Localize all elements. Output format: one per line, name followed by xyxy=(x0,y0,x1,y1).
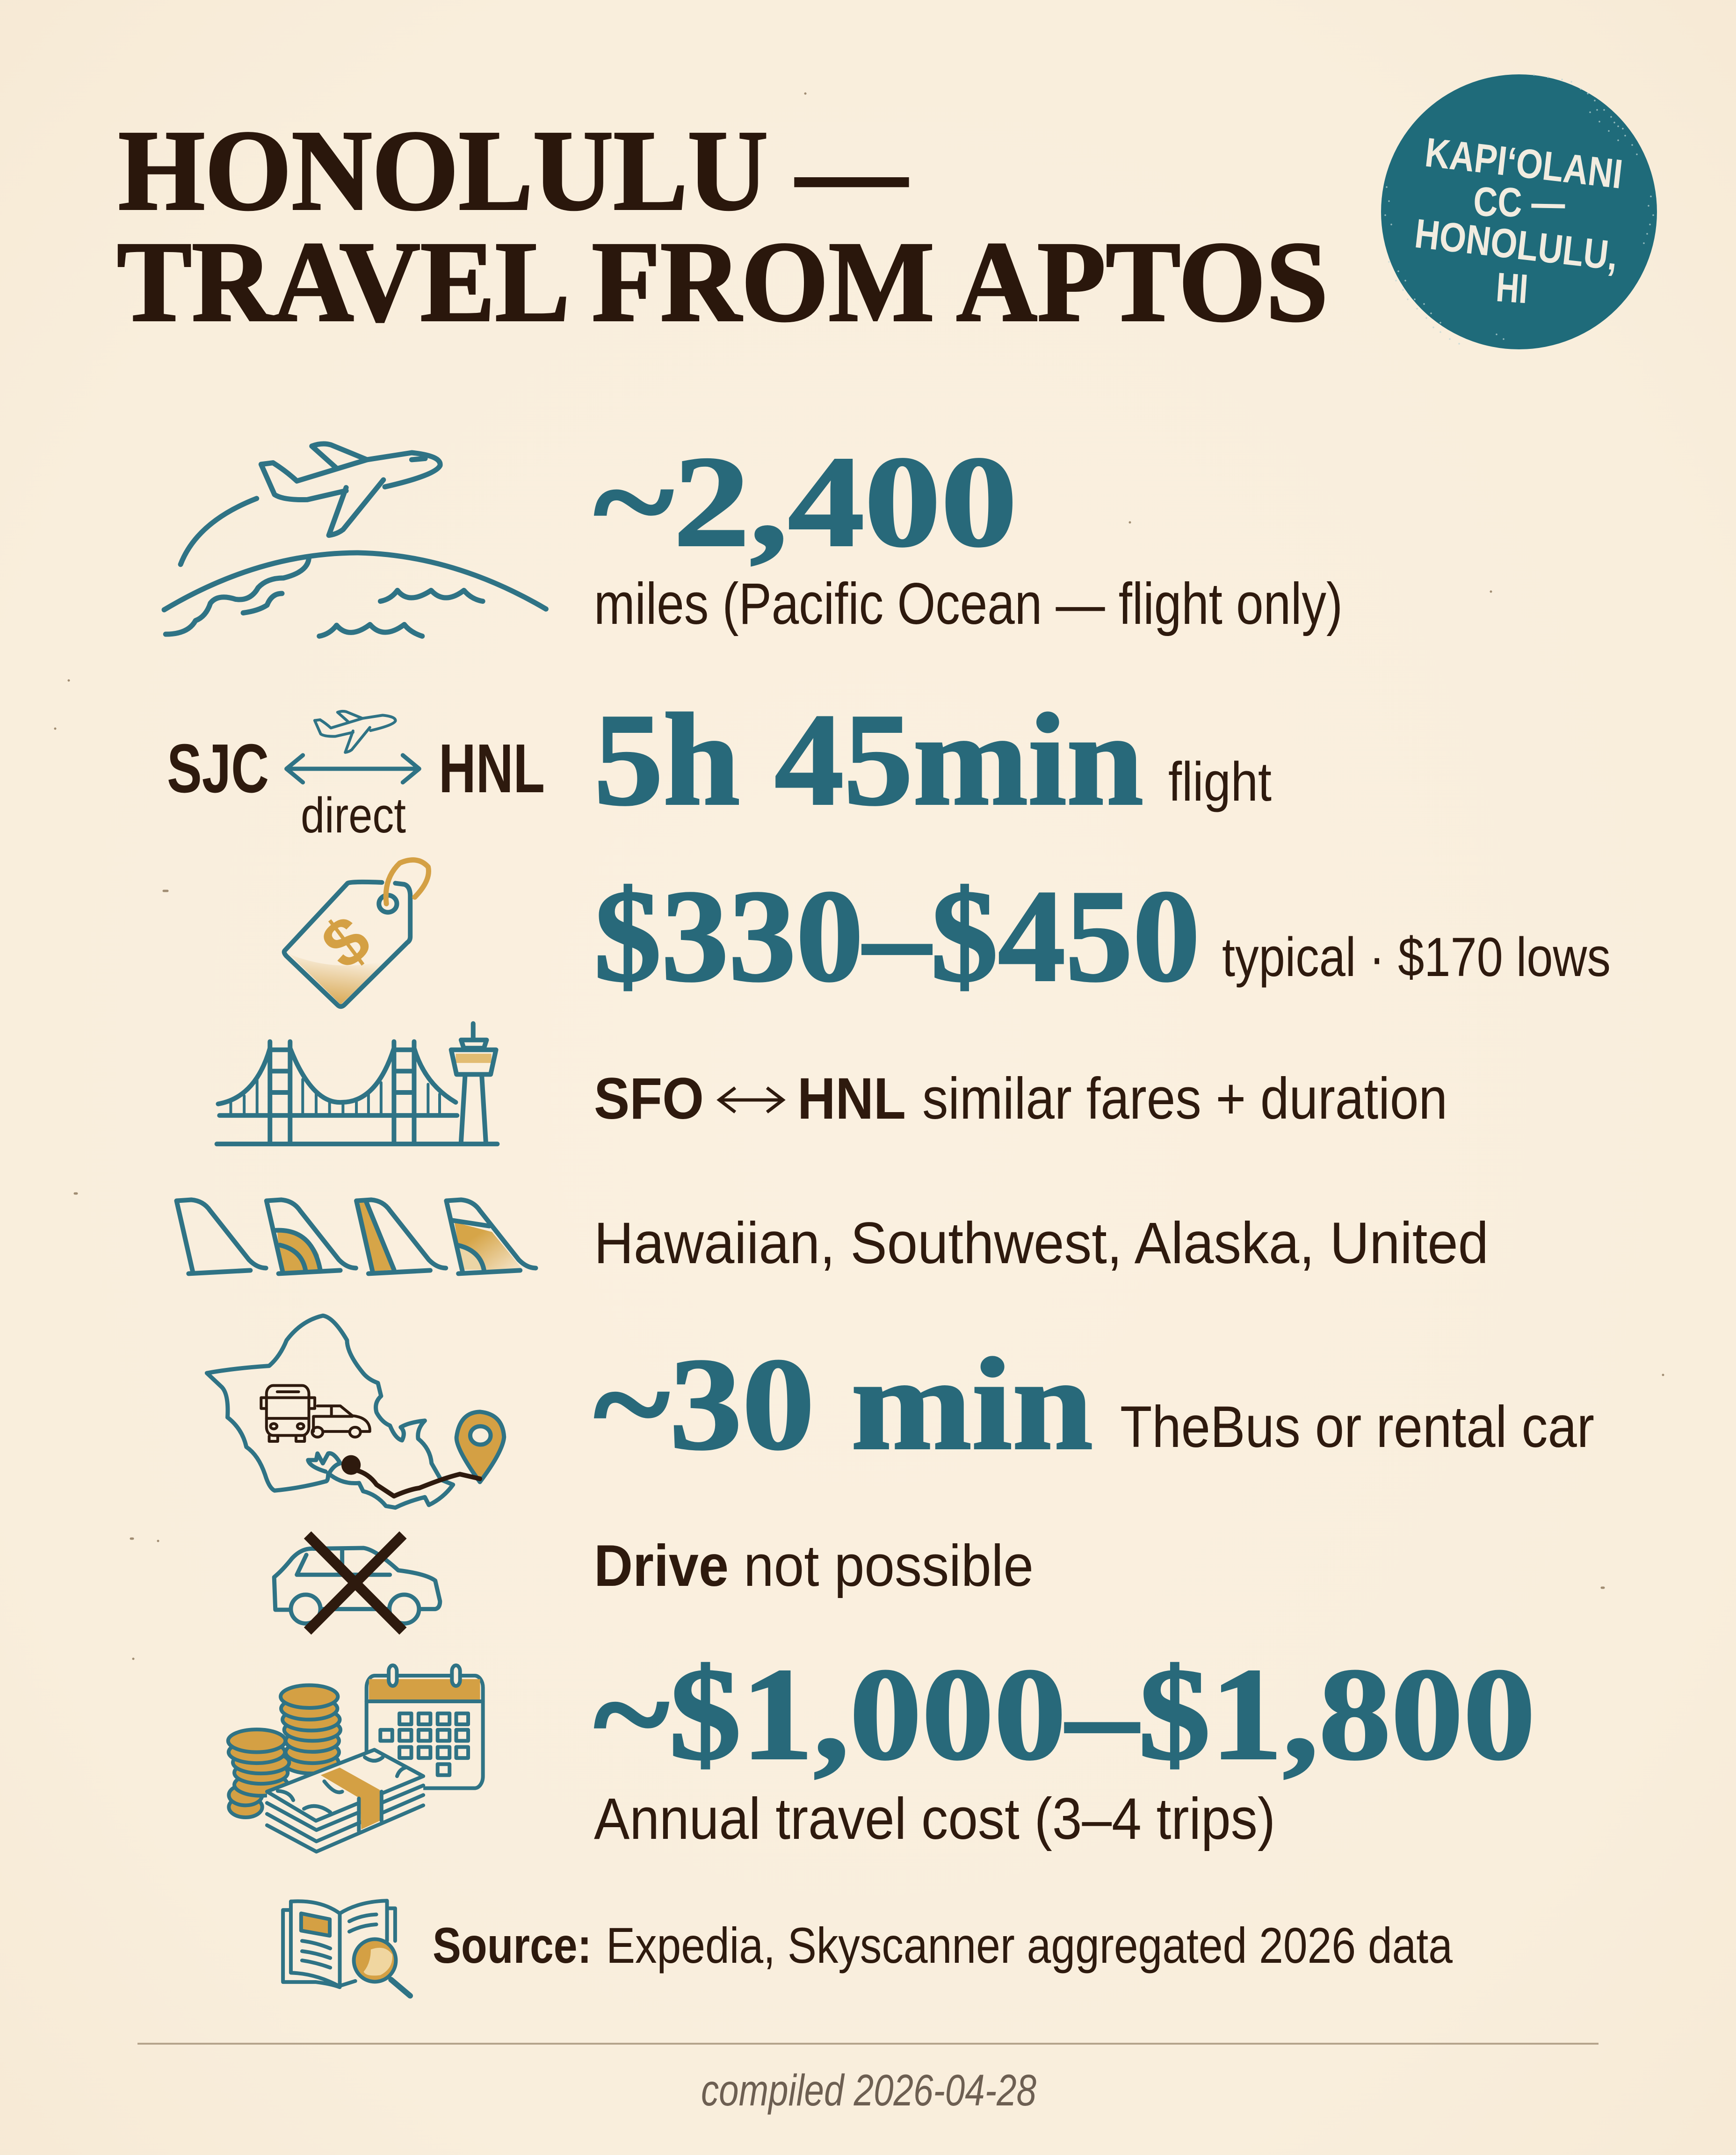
icon: bridge and control tower xyxy=(217,1024,497,1144)
stat: annual cost: Annual travel cost (3–4 trips) xyxy=(594,1786,1275,1851)
stat: distance: miles (Pacific Ocean — flight only) xyxy=(594,571,1343,636)
stat: flight time: flight xyxy=(1168,751,1272,813)
route: SJC to HNL direct: HNL xyxy=(439,730,545,807)
stat: flight time: 5h 45min xyxy=(594,687,1143,832)
source line: Source: xyxy=(433,1917,592,1974)
icon: Oahu map with bus, car and route xyxy=(207,1316,504,1508)
badge: Kapi'olani CC: HI xyxy=(1495,264,1529,312)
stat: distance: ~2,400 xyxy=(594,430,1017,574)
icon: price tag xyxy=(284,860,428,1006)
route: SJC to HNL direct: direct xyxy=(301,787,406,843)
route: SJC to HNL direct: SJC xyxy=(167,730,269,807)
stat: fares: typical · $170 lows xyxy=(1222,926,1611,988)
badge: Kapi'olani CC xyxy=(1381,74,1657,349)
text: drive not possible xyxy=(594,1533,1034,1598)
text: SFO to HNL: HNL xyxy=(797,1066,906,1131)
icon: plane over globe xyxy=(164,444,546,636)
text: airlines: Hawaiian, Southwest, Alaska, United xyxy=(594,1211,1489,1276)
text: drive not possible: Drive xyxy=(594,1533,729,1598)
route: SJC to HNL direct xyxy=(167,711,545,843)
compiled date: compiled 2026-04-28 xyxy=(701,2066,1036,2115)
source line: Expedia, Skyscanner aggregated 2026 data xyxy=(606,1917,1453,1974)
stat: transfer time: ~30 min xyxy=(594,1331,1093,1477)
text: drive not possible: not possible xyxy=(744,1533,1034,1598)
stat: fares: $330–$450 xyxy=(594,863,1200,1009)
icon: coins, calendar and cash xyxy=(228,1665,483,1851)
stat: distance xyxy=(594,430,1343,636)
badge: Kapi'olani CC: HONOLULU, xyxy=(1412,210,1620,279)
text: SFO to HNL xyxy=(594,1066,1447,1131)
icon: crossed-out car xyxy=(274,1535,440,1631)
text: SFO to HNL: similar fares + duration xyxy=(922,1066,1447,1131)
stat: transfer time: TheBus or rental car xyxy=(1120,1395,1594,1460)
title xyxy=(117,107,1328,346)
text: SFO to HNL: SFO xyxy=(594,1066,704,1131)
stat: fares xyxy=(594,863,1611,1009)
title: HONOLULU — xyxy=(118,107,908,234)
icon: airline tails xyxy=(176,1200,536,1273)
stat: annual cost xyxy=(594,1641,1535,1851)
stat: transfer time xyxy=(594,1331,1594,1477)
badge: Kapi'olani CC: CC — xyxy=(1473,178,1565,226)
title: TRAVEL FROM APTOS xyxy=(117,218,1328,346)
icon: book and magnifier xyxy=(283,1901,410,1996)
icon: price tag: $ xyxy=(308,900,383,983)
stat: annual cost: ~$1,000–$1,800 xyxy=(594,1641,1535,1787)
badge: Kapi'olani CC: KAPI‘OLANI xyxy=(1423,129,1625,197)
